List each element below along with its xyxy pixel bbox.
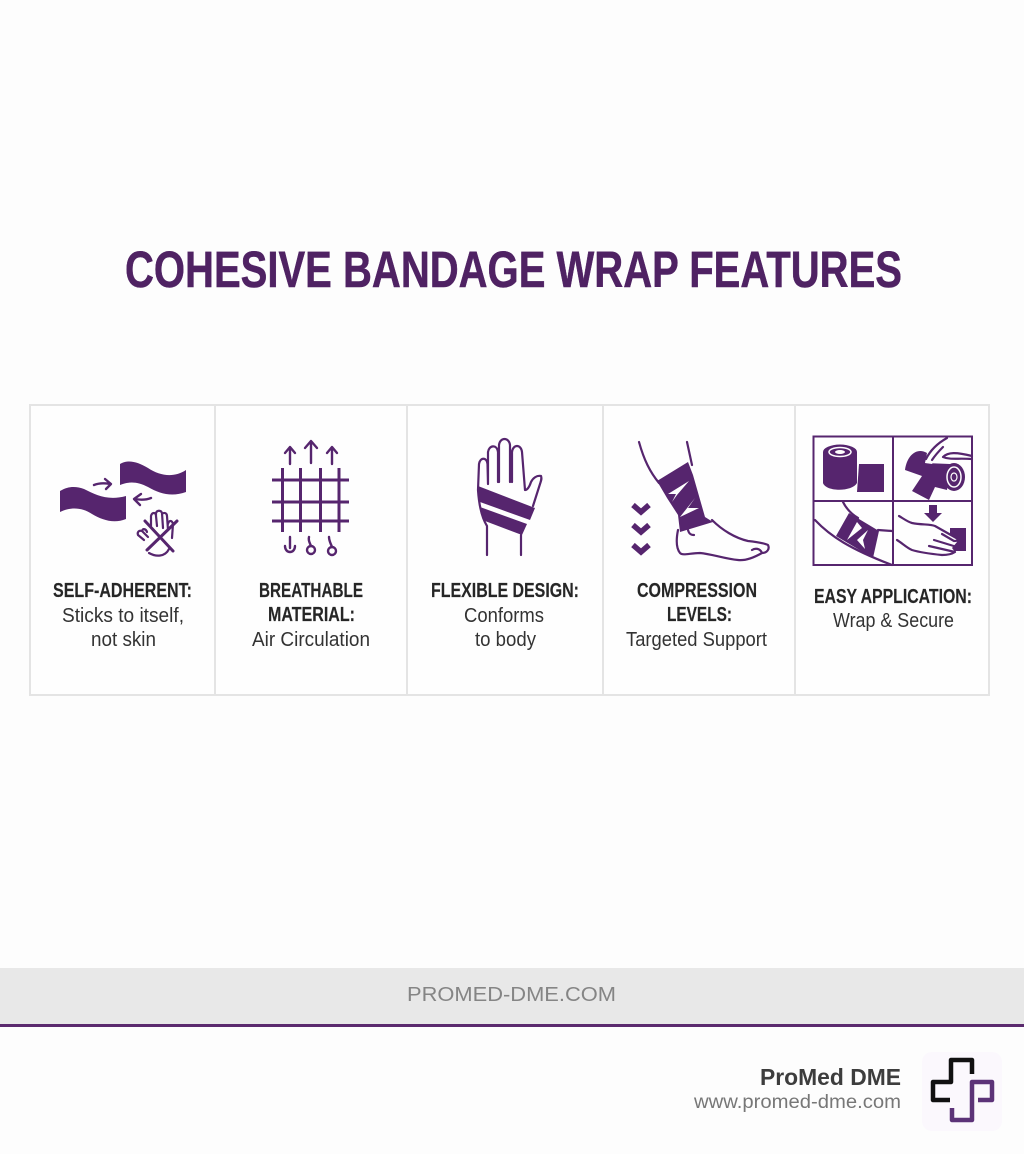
text: self-adherent: SELF-ADHERENT:	[53, 580, 192, 602]
text: breathable material: MATERIAL:	[268, 604, 355, 626]
text: flexible design	[431, 580, 579, 651]
panel: self-adherent	[53, 461, 192, 651]
panel: features row	[30, 405, 989, 695]
text: breathable material: BREATHABLE	[259, 580, 363, 602]
logo	[922, 1052, 1002, 1131]
icon: application steps	[814, 436, 972, 565]
text: easy application: Wrap & Secure	[833, 610, 954, 632]
text: breathable material	[252, 580, 370, 651]
icon: wrapped ankle and foot	[633, 442, 769, 560]
text: flexible design: Conforms	[464, 605, 544, 627]
panel: compression levels	[626, 442, 769, 651]
text: easy application	[814, 586, 972, 632]
icon: breathable mesh	[272, 441, 349, 555]
text: compression levels: LEVELS:	[667, 604, 732, 626]
text: compression levels	[626, 580, 767, 651]
panel: breathable material	[252, 441, 370, 651]
text: flexible design: to body	[475, 629, 536, 651]
footer band: PROMED-DME.COM	[407, 984, 616, 1006]
text: compression levels: COMPRESSION	[637, 580, 757, 602]
icon: ribbons and crossed-out hand	[60, 461, 186, 556]
panel: flexible design	[431, 439, 579, 651]
text: easy application: EASY APPLICATION:	[814, 586, 972, 608]
icon: wrapped hand	[478, 439, 541, 555]
footer band	[0, 968, 1024, 1027]
website url: www.promed-dme.com	[693, 1092, 901, 1113]
text: flexible design: FLEXIBLE DESIGN:	[431, 580, 579, 602]
brand name: ProMed DME	[760, 1064, 901, 1090]
panel: easy application	[814, 436, 972, 632]
text: self-adherent: not skin	[91, 629, 156, 651]
text: self-adherent: Sticks to itself,	[62, 605, 184, 627]
text: self-adherent	[53, 580, 192, 651]
text: breathable material: Air Circulation	[252, 629, 370, 651]
text: compression levels: Targeted Support	[626, 629, 767, 651]
